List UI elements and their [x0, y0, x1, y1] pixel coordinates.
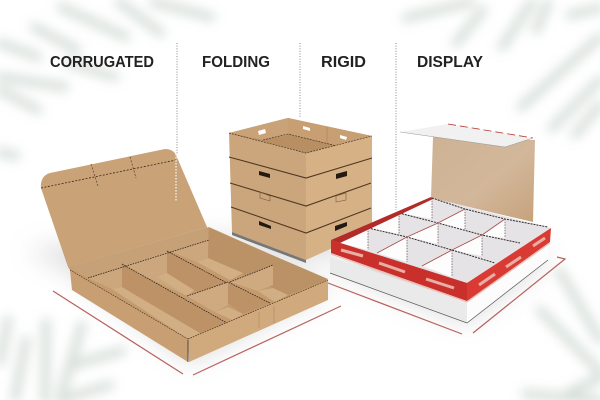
interior base	[68, 227, 328, 345]
right face	[306, 136, 372, 260]
dividers	[167, 251, 227, 292]
heading: RIGID: RIGID	[321, 54, 366, 71]
display box	[330, 124, 551, 323]
folding box stack	[229, 118, 372, 263]
corrugated box	[41, 149, 328, 362]
front right wall	[188, 280, 328, 362]
back wall	[88, 268, 122, 289]
heading: CORRUGATED: CORRUGATED	[50, 54, 154, 71]
heading: DISPLAY: DISPLAY	[417, 54, 483, 71]
white cell walls	[332, 198, 505, 277]
front left wall	[70, 270, 188, 362]
left face	[229, 133, 306, 260]
dotted divider lines	[177, 43, 396, 210]
rim slots	[341, 238, 545, 288]
red rim	[331, 240, 467, 301]
hinge strip	[68, 227, 209, 278]
interior walls	[229, 118, 372, 153]
cell posts	[368, 198, 505, 277]
lid	[400, 124, 533, 147]
ground shadows	[25, 200, 550, 362]
compartment floors	[112, 287, 200, 339]
interior cells	[331, 198, 551, 283]
heading: FOLDING: FOLDING	[202, 54, 270, 71]
seam lines	[229, 157, 372, 233]
white base	[330, 257, 467, 323]
lid	[41, 149, 207, 267]
right inner wall	[208, 228, 328, 295]
handle slots	[259, 171, 347, 231]
back panel	[431, 137, 535, 222]
cell top edges	[368, 198, 548, 263]
measure lines	[53, 257, 565, 375]
divider top edges	[88, 240, 273, 323]
